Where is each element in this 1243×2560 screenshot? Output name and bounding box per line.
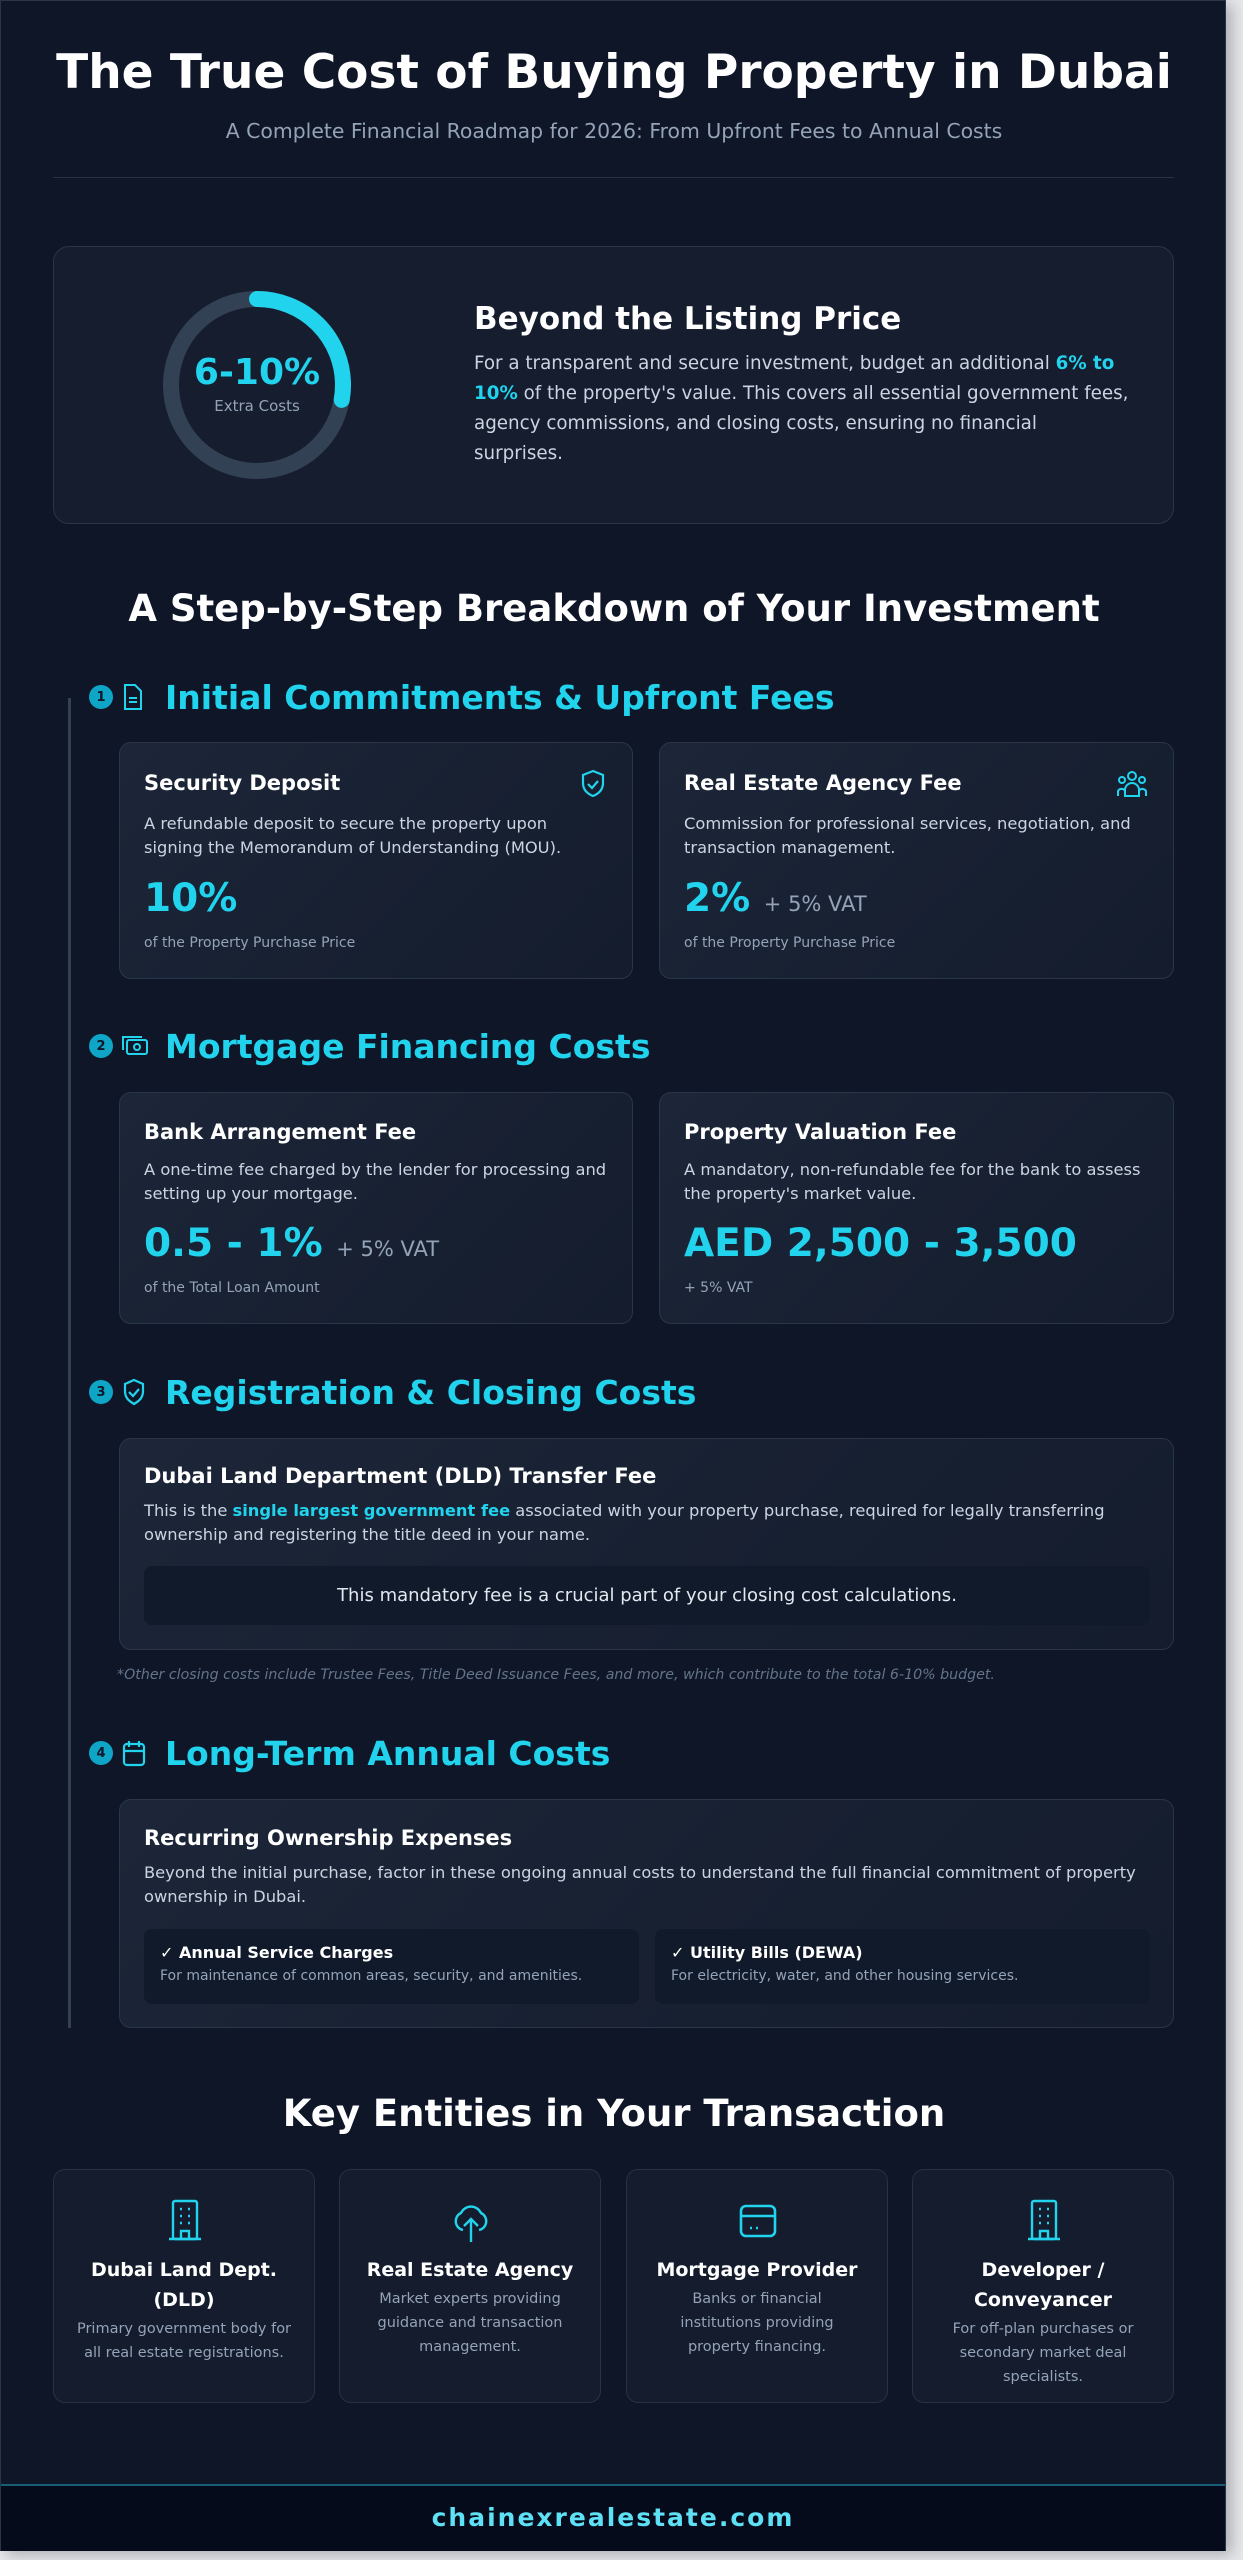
card: security deposit: Security Deposit [144,771,340,795]
donut chart [163,291,351,479]
card: security deposit: of the Property Purchase Price [144,935,355,951]
footer [1,2484,1225,2551]
card: security deposit: 10% [144,876,237,921]
card: bank arrangement fee [119,1092,633,1324]
hero text: surprises. [474,443,563,464]
entity: agency: Real Estate Agency [367,2259,573,2281]
entity: developer [912,2169,1174,2403]
step 3 heading: Registration & Closing Costs [165,1372,696,1412]
footnote: *Other closing costs include Trustee Fees, Title Deed Issuance Fees, and more, which contribute to the total 6-10% budget. [117,1667,995,1683]
card: valuation fee: AED 2,500 - 3,500 [684,1221,1077,1266]
entity: mortgage provider: Mortgage Provider [656,2259,858,2281]
card: recurring expenses: Recurring Ownership Expenses [144,1826,512,1850]
callout box: This mandatory fee is a crucial part of your closing cost calculations. [337,1585,957,1606]
step 2 heading: 2 [96,1038,106,1054]
icon: card [740,2204,776,2238]
step 2 heading: Mortgage Financing Costs [165,1026,650,1066]
item: service charges: ✓ Annual Service Charges [160,1943,393,1962]
hero heading: Beyond the Listing Price [474,301,901,337]
icon: people [1117,771,1147,797]
footer: chainexrealestate.com [432,2503,794,2532]
step 1 heading: 1 [96,690,106,704]
section heading: breakdown: A Step-by-Step Breakdown of Your Investment [128,587,1100,630]
entity: DLD: (DLD) [153,2289,215,2311]
card: DLD transfer fee: Dubai Land Department (DLD) Transfer Fee [144,1464,656,1488]
card: agency fee [659,742,1174,979]
card: bank arrangement fee: of the Total Loan Amount [144,1280,320,1296]
card: DLD transfer fee: This is the single largest government fee associated with your property purchase, required for legally transferring ownership and registering the title deed in your name. [144,1501,1105,1544]
callout box [144,1566,1150,1625]
entity: developer: Conveyancer [974,2289,1112,2311]
entity: developer: Developer / [982,2259,1104,2281]
card: valuation fee [659,1092,1174,1324]
item: service charges [144,1929,639,2004]
icon: calendar [122,1741,146,1766]
card: agency fee: 2% + 5% VAT [684,876,867,921]
item: utility bills: ✓ Utility Bills (DEWA) [671,1943,863,1962]
icon: building [1028,2200,1060,2240]
card: bank arrangement fee: A one-time fee charged by the lender for processing and setting up your mortgage. [144,1160,606,1203]
step 4 heading: 4 [96,1746,106,1760]
item: service charges: For maintenance of common areas, security, and amenities. [160,1968,582,1984]
icon: document [124,684,142,710]
card: security deposit: A refundable deposit to secure the property upon signing the Memorandum of Understanding (MOU). [144,814,561,857]
icon: shield check [124,1378,144,1406]
item: utility bills [655,1929,1150,2004]
card: recurring expenses [119,1799,1174,2028]
entity: mortgage provider [626,2169,888,2403]
icon: cloud upload [454,2205,488,2242]
card: recurring expenses: Beyond the initial purchase, factor in these ongoing annual costs to understand the full financial commitment of property ownership in Dubai. [144,1863,1136,1906]
card: agency fee: of the Property Purchase Price [684,935,895,951]
entity: DLD [53,2169,315,2403]
card: security deposit [119,742,633,979]
donut chart: Extra Costs [214,397,300,415]
icon: shield [582,770,604,798]
card: agency fee: Commission for professional services, negotiation, and transaction management. [684,814,1131,857]
card: agency fee: Real Estate Agency Fee [684,771,962,795]
step 3 heading: 3 [96,1384,106,1400]
entity: developer: For off-plan purchases or secondary market deal specialists. [953,2321,1133,2385]
entity: DLD: Primary government body for all real estate registrations. [77,2321,291,2361]
step 4 heading: Long-Term Annual Costs [165,1734,610,1772]
subtitle: A Complete Financial Roadmap for 2026: From Upfront Fees to Annual Costs [226,119,1002,143]
card: bank arrangement fee: Bank Arrangement Fee [144,1120,416,1144]
entity: mortgage provider: Banks or financial institutions providing property financing. [680,2291,834,2355]
icon: money [122,1036,148,1055]
title: The True Cost of Buying Property in Dubai [56,45,1172,100]
card: DLD transfer fee [119,1438,1174,1650]
hero text: For a transparent and secure investment, budget an additional 6% to 10% of the property's value. This covers all essential government fees, agency commissions, and closing costs, ensuring no financial [474,353,1128,434]
donut chart: 6-10% [194,352,320,393]
card: bank arrangement fee: 0.5 - 1% + 5% VAT [144,1221,439,1266]
item: utility bills: For electricity, water, and other housing services. [671,1968,1018,1984]
step 1 heading: Initial Commitments & Upfront Fees [165,678,835,716]
entity: DLD: Dubai Land Dept. [91,2259,277,2281]
card: valuation fee: Property Valuation Fee [684,1120,956,1144]
card: valuation fee: A mandatory, non-refundable fee for the bank to assess the property's market value. [684,1160,1140,1203]
entity: agency: Market experts providing guidance and transaction management. [377,2291,562,2355]
icon: building [169,2200,201,2240]
section heading: key entities: Key Entities in Your Transaction [283,2092,945,2135]
entity: agency [339,2169,601,2403]
panel: hero summary [53,246,1174,524]
card: valuation fee: + 5% VAT [684,1280,753,1296]
